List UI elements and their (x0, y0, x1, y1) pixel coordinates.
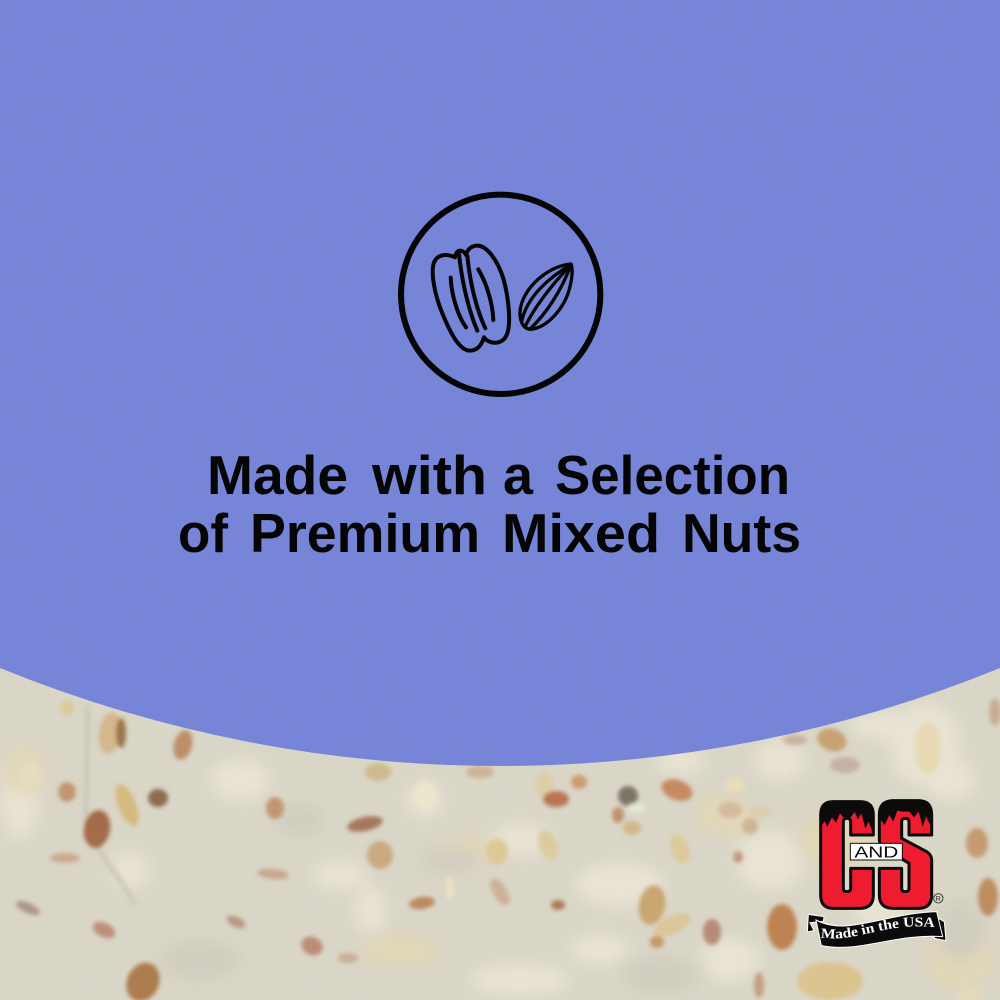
headline line 2: Mixed (502, 502, 660, 564)
icon ring (401, 195, 600, 394)
headline line 2: Premium (250, 502, 480, 564)
logo registered mark: R (936, 896, 941, 903)
headline line 1: with (371, 444, 487, 506)
icon: pecan (433, 246, 509, 351)
blue curved panel (0, 0, 1000, 766)
headline line 1: a (503, 444, 533, 506)
logo registered mark (934, 894, 943, 903)
headline line 1: Made (207, 444, 348, 506)
logo letter S (879, 801, 932, 908)
icon: mixed nuts in circle (401, 195, 600, 394)
logo: C and S Made in the USA (806, 799, 946, 948)
headline (178, 444, 801, 564)
headline line 2: Nuts (682, 502, 801, 564)
logo ribbon banner: Made in the USA (820, 917, 934, 939)
headline line 1: Selection (555, 444, 790, 506)
icon: almond (520, 264, 572, 329)
logo letter C (821, 802, 873, 908)
logo ribbon banner (806, 911, 946, 948)
logo AND box (850, 843, 902, 861)
headline line 2: of (178, 502, 229, 564)
logo AND box: AND (854, 844, 898, 861)
